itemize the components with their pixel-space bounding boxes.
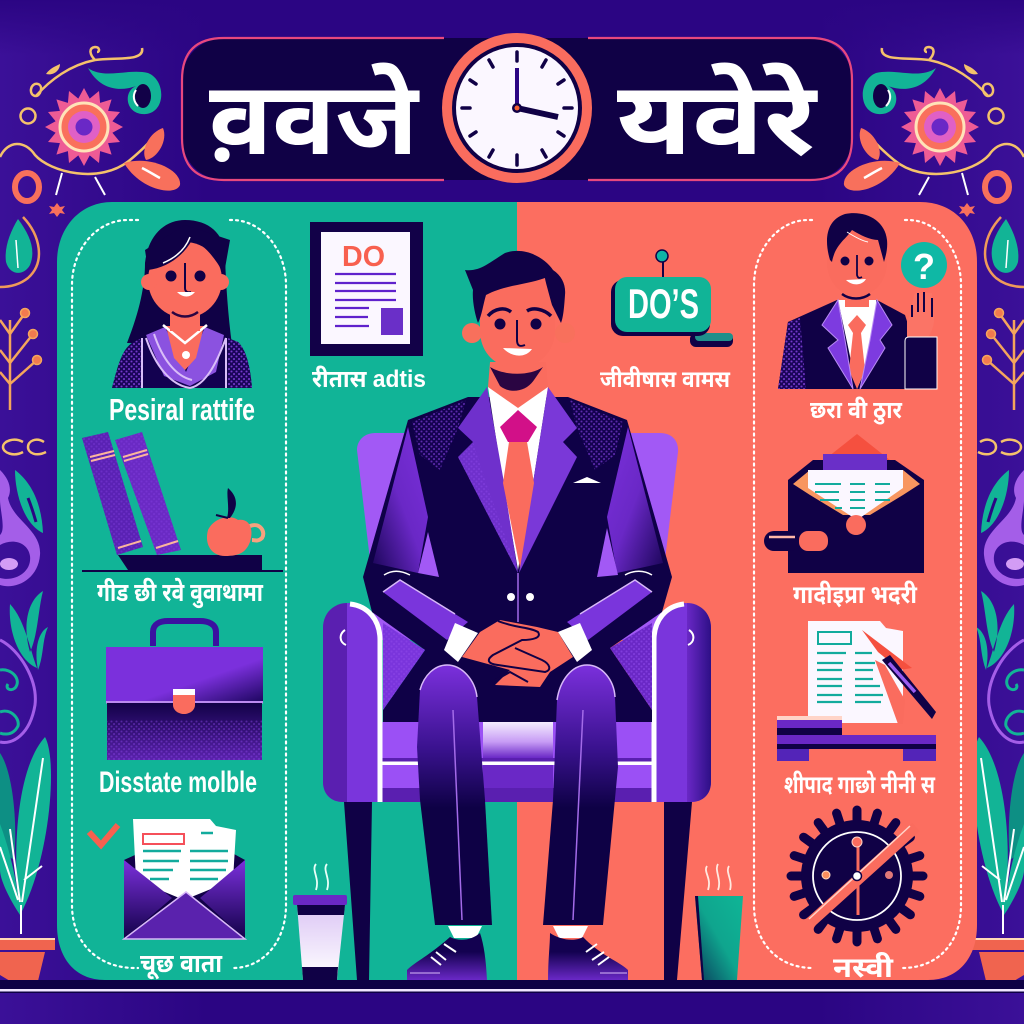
panel: right coral half <box>517 202 977 980</box>
seat <box>382 722 652 758</box>
chair back <box>357 433 678 640</box>
legs <box>417 665 618 925</box>
label: envelope: चूछ वाता <box>140 948 223 980</box>
panel: left green half <box>57 202 517 980</box>
icon: coffee cup left <box>293 864 347 980</box>
label: woman: Pesiral rattife <box>109 392 255 427</box>
icon: envelope with letter <box>124 819 245 939</box>
DO heading: DO <box>342 241 385 273</box>
cuffs <box>444 623 478 662</box>
jacket <box>363 387 672 722</box>
sleeves <box>373 427 428 573</box>
label: books: गीड छी रवे वुवाथामा <box>97 577 264 608</box>
pocket square <box>573 477 601 483</box>
icon: man raising hand with question <box>778 213 947 389</box>
label: briefcase: Disstate molble <box>99 766 257 799</box>
title: right word: यवेरे <box>617 61 818 176</box>
label: man: छरा वी ठुार <box>810 396 902 425</box>
shirt <box>488 387 548 570</box>
tie <box>503 442 534 568</box>
question mark: ? <box>913 246 935 287</box>
label: bubble: जीवीषास वामस <box>600 366 731 392</box>
icon: document with DO heading <box>310 222 423 356</box>
left chair arm <box>323 603 382 802</box>
icon: crossed out gear clock <box>791 810 923 942</box>
label: open envelope: गादीइप्रा भदरी <box>793 580 918 609</box>
label: paper and pen: शीपाद गाछो नीनी स <box>784 770 935 799</box>
decorative ornaments: right <box>844 47 1024 981</box>
label: gear: नस्वी <box>833 951 894 983</box>
label: document: रीतास adtis <box>312 365 426 393</box>
buttons <box>507 593 515 601</box>
armchair <box>323 433 711 980</box>
speech bubble: DO'S <box>611 250 733 347</box>
icon: check mark <box>89 825 118 845</box>
icon: books and apple <box>82 432 283 572</box>
lapels <box>458 387 518 573</box>
icon: coffee cup right <box>695 864 743 980</box>
chair legs <box>344 802 692 980</box>
dotted frame: right <box>754 220 961 968</box>
icon: woman portrait <box>112 220 252 388</box>
shoes <box>407 933 628 980</box>
decorative ornaments: left <box>0 47 180 981</box>
header title plate <box>182 33 852 183</box>
title: left word: व़वजे <box>209 61 420 176</box>
icon: clock <box>442 33 592 183</box>
man in suit <box>363 251 672 980</box>
forearms <box>383 580 468 640</box>
right chair arm <box>652 603 711 802</box>
footer band <box>0 980 1024 993</box>
icon: open envelope with letter <box>764 434 924 573</box>
icon: briefcase <box>106 621 263 760</box>
icon: paper and pen on desk <box>777 621 936 761</box>
hands <box>444 620 592 687</box>
dotted frame: left <box>72 220 286 968</box>
bubble text: DO’S <box>628 280 699 327</box>
neck and head <box>462 251 575 408</box>
socks <box>448 926 588 938</box>
